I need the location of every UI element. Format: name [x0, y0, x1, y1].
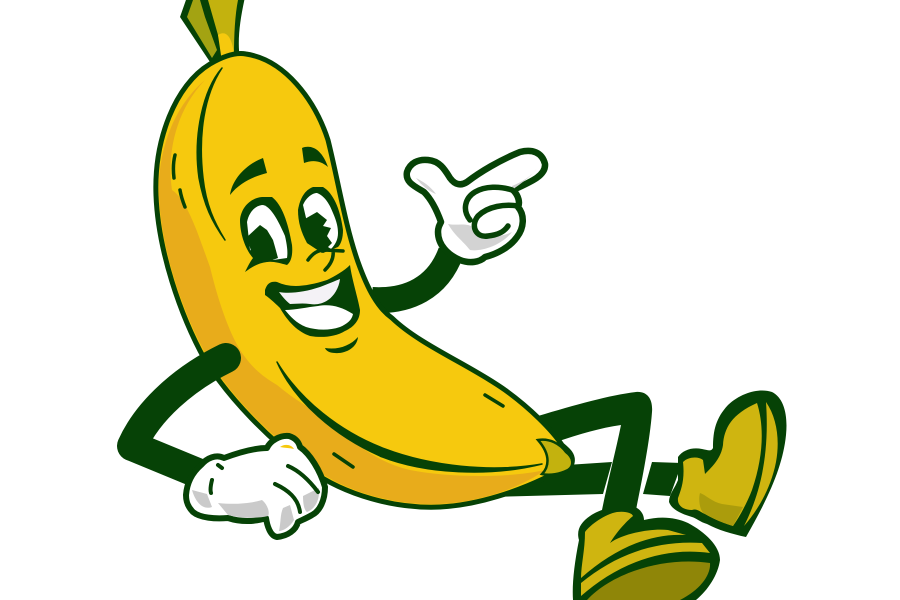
- right arm: [372, 252, 451, 300]
- dashes: [173, 155, 503, 467]
- right pupil: [303, 212, 332, 253]
- leg: bent: [538, 392, 652, 510]
- banana body: [156, 54, 572, 507]
- right eyebrow: [302, 147, 328, 167]
- resting hand: [186, 436, 325, 537]
- boot band: [581, 543, 710, 596]
- left eye: [240, 197, 292, 272]
- boot: raised right: [669, 391, 786, 537]
- chin line: [325, 337, 358, 353]
- nose: [308, 250, 343, 270]
- lower teeth: [285, 305, 353, 330]
- body shade: [159, 80, 545, 504]
- left pupil: [247, 225, 278, 262]
- tip: [538, 440, 572, 475]
- hand shading: [192, 488, 319, 531]
- right eye: [298, 187, 343, 253]
- contour line: upper: [197, 68, 225, 240]
- left arm: [132, 358, 226, 474]
- finger lines: [211, 465, 318, 512]
- boot: lower left: [573, 506, 720, 600]
- boot sole: [587, 562, 710, 600]
- left eyebrow: [230, 158, 267, 195]
- banana stem: [180, 0, 245, 65]
- pointing hand: [407, 151, 545, 262]
- contour line: smile: [277, 362, 542, 472]
- mouth: [265, 265, 360, 337]
- leg: horizontal: [490, 462, 682, 497]
- curled fingers: [465, 187, 518, 236]
- upper teeth: [279, 279, 340, 304]
- face: [230, 147, 360, 353]
- hand shading: [416, 168, 537, 250]
